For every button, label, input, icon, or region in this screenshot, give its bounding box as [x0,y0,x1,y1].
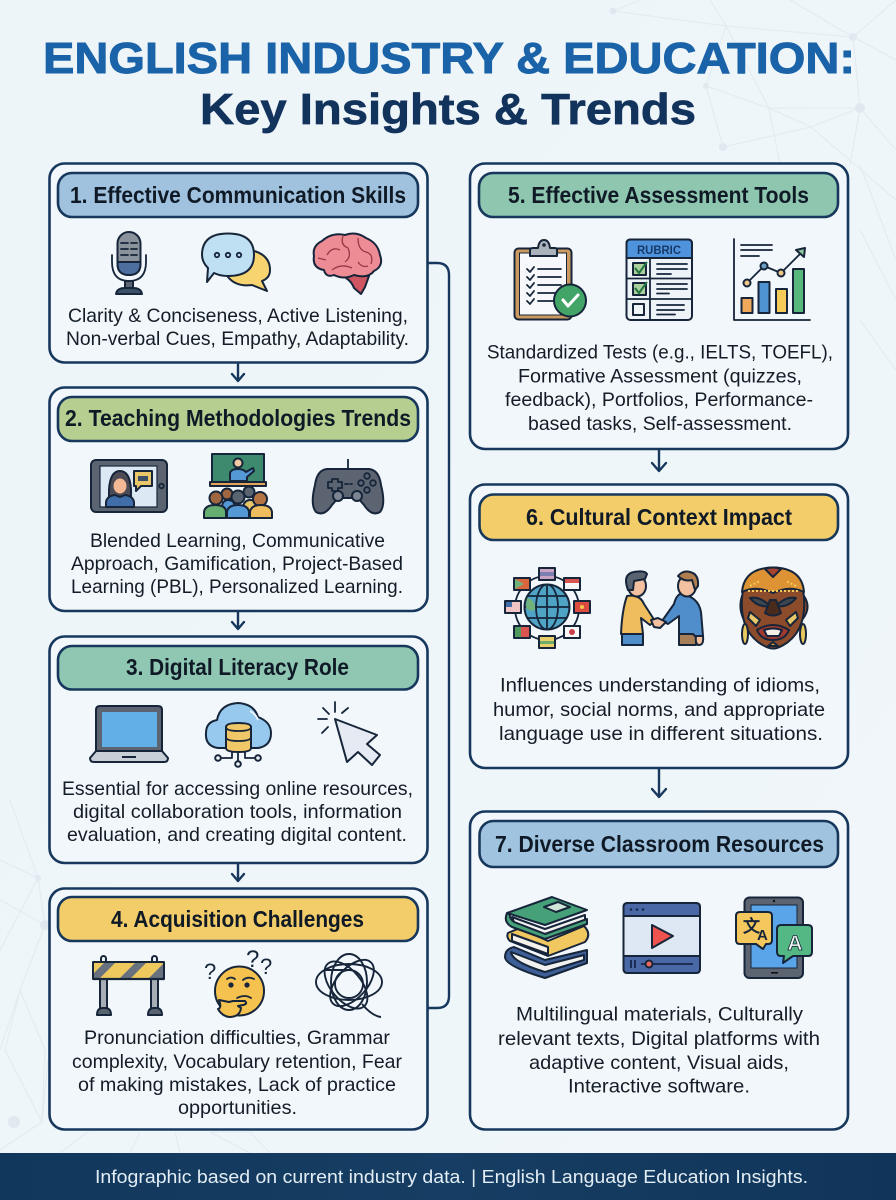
text: card 5 body: Formative Assessment (quizzes, [518,366,802,388]
heading: card 6 [480,494,838,540]
text: card 4 body: opportunities. [178,1097,297,1119]
icon: laptop [90,706,168,762]
text: card 2 body: Blended Learning, Communicative [90,530,385,552]
heading: card 3 [58,646,418,690]
icon: cloud database [206,703,271,767]
icon: game controller [313,459,383,513]
text: card 7 body: Interactive software. [568,1076,750,1098]
text: card 4 body: of making mistakes, Lack of practice [78,1074,396,1096]
icon: thinking face: ? [204,959,216,984]
panel: 7. Diverse Classroom Resources [470,812,848,1130]
title: Key Insights & Trends [200,85,696,134]
icon: classroom with teacher [204,454,272,518]
icon: tangled scribble [316,952,382,1017]
icon: bar and line chart [734,239,810,320]
icon: tribal mask [740,568,808,649]
icon: video player [624,903,700,973]
text: card 1 body: Non-verbal Cues, Empathy, Adaptability. [66,328,409,350]
heading: card 6: 6. Cultural Context Impact [526,504,792,530]
icon: clipboard checklist [514,240,586,320]
heading: card 4 [58,897,418,941]
heading: card 2 [58,397,418,441]
icon: thinking face [204,946,272,1017]
text: card 3 body [62,778,413,846]
icon: video lesson tablet [91,460,167,512]
heading: card 2: 2. Teaching Methodologies Trends [65,405,411,431]
arrow: card 5 to card 6 [652,450,666,471]
icon: stack of books [505,897,588,978]
text: card 6 body: humor, social norms, and appropriate [493,699,825,721]
text: card 3 body: Essential for accessing online resources, [62,778,413,800]
text: card 4 body: complexity, Vocabulary retention, Fear [72,1051,403,1073]
heading: card 1: 1. Effective Communication Skills [70,182,406,208]
icon: brain [314,234,381,294]
heading: card 5 [479,173,838,217]
text: card 7 body: adaptive content, Visual aids, [529,1052,789,1074]
text: card 2 body [71,530,403,598]
panel: 3. Digital Literacy Role [50,636,428,863]
heading: card 3: 3. Digital Literacy Role [126,654,349,680]
text: card 1 body [66,305,409,350]
panel: 5. Effective Assessment Tools [470,164,848,449]
text: card 5 body: Standardized Tests (e.g., IELTS, TOEFL), [487,342,833,364]
text: card 7 body [498,1004,820,1098]
connector: left column to right column [428,263,449,1008]
icon: handshake [621,571,703,645]
icon: thinking face: ? [260,954,272,979]
arrow: card 2 to card 3 [232,612,244,629]
title [43,34,855,134]
text: card 6 body: Influences understanding of idioms, [500,674,820,696]
icon: rubric sheet: RUBRIC [637,245,681,257]
text: card 6 body [493,674,825,745]
icon: cursor click [318,702,380,765]
text: card 5 body: based tasks, Self-assessment. [528,413,792,435]
panel: 6. Cultural Context Impact [470,484,848,768]
text: card 7 body: Multilingual materials, Culturally [516,1004,803,1026]
panel: 1. Effective Communication Skills [50,164,428,362]
heading: card 7 [480,821,838,867]
icon: road barrier [93,956,164,1015]
text: card 4 body: Pronunciation difficulties, Grammar [84,1027,390,1049]
text: card 3 body: digital collaboration tools, information [73,801,402,823]
footer bar [0,1153,896,1200]
icon: rubric sheet [626,240,692,320]
icon: globe with flags [505,568,590,648]
arrow: card 1 to card 2 [232,364,244,381]
icon: translation tablet: 文 [743,916,761,936]
heading: card 5: 5. Effective Assessment Tools [508,182,809,208]
text: card 5 body [487,342,833,435]
icon: thinking face: ? [246,946,259,973]
icon: speech bubbles [202,234,270,291]
arrow: card 6 to card 7 [652,769,666,797]
icon: translation tablet: A [787,932,803,955]
text: card 1 body: Clarity & Conciseness, Active Listening, [68,305,408,327]
arrow: card 3 to card 4 [232,864,244,881]
panel: 4. Acquisition Challenges [50,888,428,1130]
icon: translation tablet [736,898,812,978]
text: card 2 body: Learning (PBL), Personalized Learning. [71,576,403,598]
text: card 6 body: language use in different situations. [499,723,823,745]
text: card 5 body: feedback), Portfolios, Performance- [505,389,813,411]
title: ENGLISH INDUSTRY & EDUCATION: [43,34,855,83]
text: card 4 body [72,1027,403,1119]
text: card 7 body: relevant texts, Digital platforms with [498,1028,820,1050]
text: card 3 body: evaluation, and creating digital content. [67,824,407,846]
heading: card 7: 7. Diverse Classroom Resources [495,831,824,857]
text: card 2 body: Approach, Gamification, Project-Based [71,553,403,575]
panel: 2. Teaching Methodologies Trends [50,388,428,611]
icon: translation tablet: A [757,927,768,944]
heading: card 4: 4. Acquisition Challenges [111,906,364,932]
footer bar: Infographic based on current industry data. | English Language Education Insights. [95,1166,808,1187]
heading: card 1 [58,173,418,217]
icon: microphone [112,232,146,294]
